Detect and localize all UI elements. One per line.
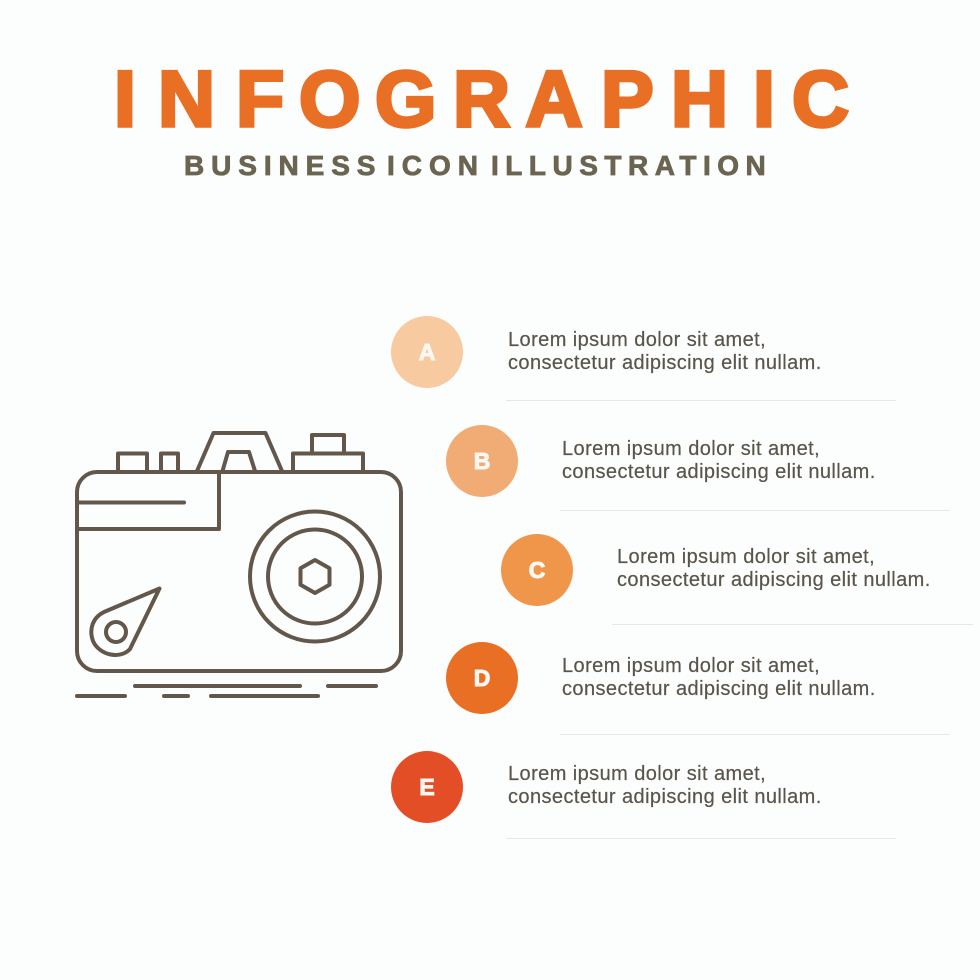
- text D: [562, 655, 876, 700]
- badge A: [391, 316, 463, 388]
- badge A: A: [419, 339, 435, 365]
- subtitle: ILLUSTRATION: [491, 150, 772, 181]
- item D: [446, 642, 950, 735]
- badge E: [391, 751, 463, 823]
- text C: Lorem ipsum dolor sit amet,: [617, 546, 875, 568]
- subtitle: [184, 150, 772, 181]
- text B: [562, 438, 876, 483]
- item E: [391, 751, 896, 839]
- badge C: [501, 534, 573, 606]
- badge D: D: [474, 665, 490, 691]
- text E: [508, 763, 822, 808]
- subtitle: BUSINESS: [184, 150, 382, 181]
- badge C: C: [529, 557, 545, 583]
- text D: consectetur adipiscing elit nullam.: [562, 678, 876, 700]
- subtitle: ICON: [387, 150, 485, 181]
- text B: Lorem ipsum dolor sit amet,: [562, 438, 820, 460]
- item B: [446, 425, 950, 511]
- text D: Lorem ipsum dolor sit amet,: [562, 655, 820, 677]
- badge D: [446, 642, 518, 714]
- text B: consectetur adipiscing elit nullam.: [562, 461, 876, 483]
- badge B: [446, 425, 518, 497]
- text E: Lorem ipsum dolor sit amet,: [508, 763, 766, 785]
- item A: [391, 316, 896, 401]
- text E: consectetur adipiscing elit nullam.: [508, 786, 822, 808]
- text A: Lorem ipsum dolor sit amet,: [508, 329, 766, 351]
- text C: consectetur adipiscing elit nullam.: [617, 569, 931, 591]
- text A: consectetur adipiscing elit nullam.: [508, 352, 822, 374]
- badge B: B: [474, 448, 490, 474]
- item C: [501, 534, 973, 625]
- icon: camera: [75, 431, 403, 698]
- text A: [508, 329, 822, 374]
- text C: [617, 546, 931, 591]
- badge E: E: [419, 774, 435, 800]
